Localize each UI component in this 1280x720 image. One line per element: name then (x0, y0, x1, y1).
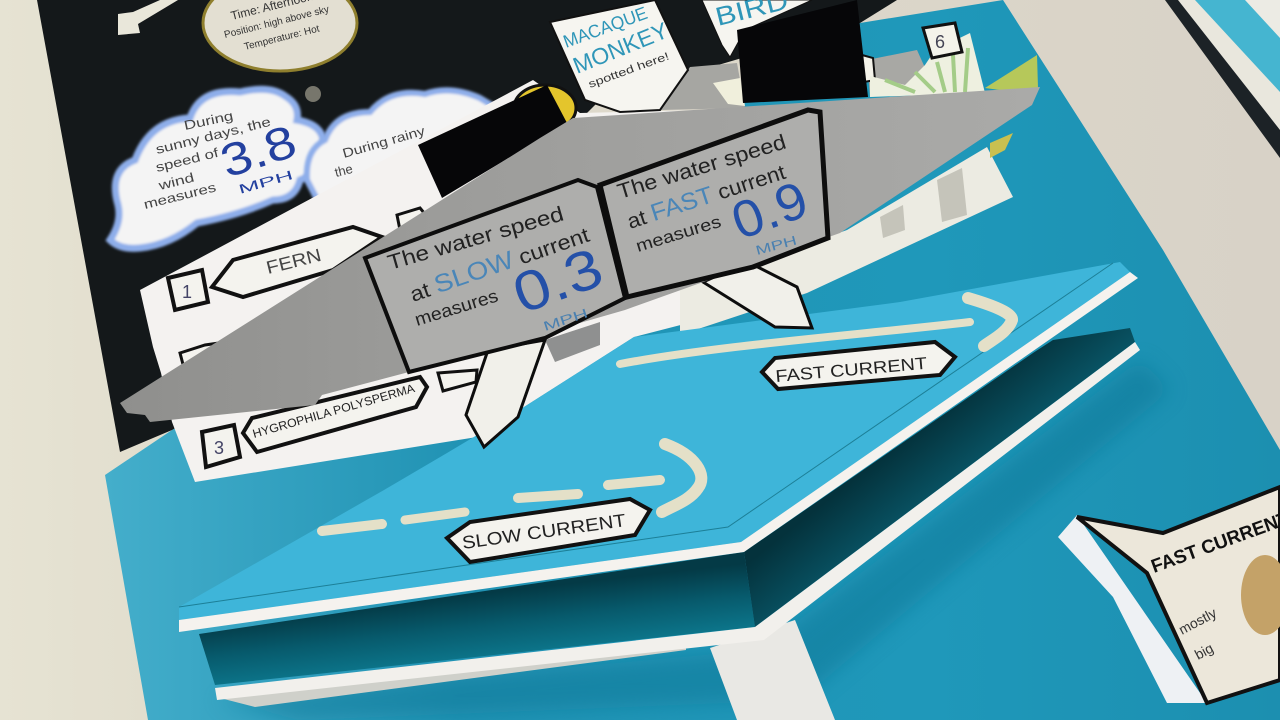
bird sign (702, 0, 812, 57)
river stand bottom post (710, 620, 835, 720)
right water speed panel: The water speed (615, 131, 789, 204)
fast current rock card (1058, 487, 1280, 703)
fern label: FERN (264, 245, 323, 278)
slow current label: SLOW CURRENT (461, 510, 627, 553)
left water speed panel (365, 180, 625, 372)
wind cloud: sunny: sunny days, the (154, 114, 272, 157)
slow current rope (322, 444, 701, 531)
fast current rope (620, 298, 1012, 364)
fast current rock card: mostly (1176, 605, 1219, 638)
fold shadow near leg (545, 322, 600, 362)
macaque monkey sign: spotted here! (587, 50, 671, 91)
yellow sun icon (514, 85, 576, 131)
fast current label (762, 342, 955, 389)
grey fold behind monkey sign (660, 63, 745, 110)
river block: lower white edge (215, 342, 1140, 700)
bridge left leg (466, 340, 545, 447)
river top white edge (179, 272, 1138, 632)
right water speed panel: MPH (754, 233, 798, 258)
fold strips (880, 168, 967, 238)
hidden tag 2 (180, 340, 240, 372)
river surface bevel line (179, 263, 1113, 607)
wind cloud: sunny: During (183, 108, 235, 133)
macaque monkey sign (550, 0, 688, 112)
wind cloud: sunny: speed of (154, 145, 220, 175)
number tag 6: 6 (935, 32, 945, 52)
left water speed panel: 0.3 (505, 235, 611, 325)
grey fold behind plant (867, 50, 935, 97)
wind cloud: sunny: 3.8 (214, 115, 302, 188)
number tag 3 (202, 425, 240, 467)
small moon dot (305, 86, 321, 102)
river block: lower foam (220, 640, 686, 707)
hidden number tag (438, 370, 477, 391)
wind cloud: sunny: MPH (237, 167, 295, 197)
wind cloud: rainy: During rainy (341, 123, 427, 161)
wind cloud: sunny: wind (156, 170, 196, 193)
number tag 1: 1 (182, 282, 192, 302)
left water speed panel: MPH (541, 305, 590, 334)
fast current rock card: big (1192, 640, 1216, 663)
slow current label (447, 499, 650, 562)
fast current label: FAST CURRENT (775, 354, 928, 386)
white arrow top left (118, 0, 178, 35)
right water speed panel (600, 110, 828, 297)
white plant panel (140, 80, 700, 482)
right water speed panel: measures (634, 212, 723, 256)
macaque monkey sign: MONKEY (569, 17, 672, 79)
bridge right leg (703, 262, 812, 328)
black backing poster (37, 0, 897, 452)
right water speed panel: 0.9 (724, 171, 816, 251)
left water speed panel: measures (412, 286, 500, 330)
plant illustration right of post (870, 33, 1038, 158)
macaque monkey sign: MACAQUE (561, 3, 650, 52)
neighbouring poster corner (1165, 0, 1280, 158)
grey metal bridge wings (120, 87, 1040, 422)
sun info circle: Position: high above sky (223, 4, 330, 41)
right water speed panel: at FAST current (624, 158, 789, 235)
number tag 6 (923, 23, 962, 58)
Hygrophila label: HYGROPHILA POLYSPERMA (251, 381, 416, 441)
hidden tag top (397, 208, 430, 230)
left water speed panel: The water speed (385, 203, 566, 275)
river top surface (179, 262, 1130, 620)
river block: teal front side (199, 552, 755, 685)
black post right (737, 0, 868, 103)
fern label (212, 227, 382, 297)
Hygrophila label (243, 377, 427, 452)
sun info circle (203, 0, 357, 71)
wind cloud: rainy: the (333, 161, 354, 180)
white fold right (680, 147, 1013, 335)
wind cloud: rainy (307, 90, 500, 205)
number tag 1 (168, 270, 208, 310)
plant illustration left of post (713, 78, 745, 106)
sun info circle: Temperature: Hot (243, 23, 321, 53)
number tag 3: 3 (214, 438, 224, 458)
wind cloud: sunny: measures (142, 179, 218, 212)
small tag behind post (862, 55, 875, 82)
left water speed panel: at SLOW current (406, 220, 593, 308)
black post left (418, 85, 567, 198)
wind cloud: sunny (110, 89, 323, 248)
river block: teal right side (744, 328, 1135, 627)
river cast shadow (215, 360, 1170, 720)
